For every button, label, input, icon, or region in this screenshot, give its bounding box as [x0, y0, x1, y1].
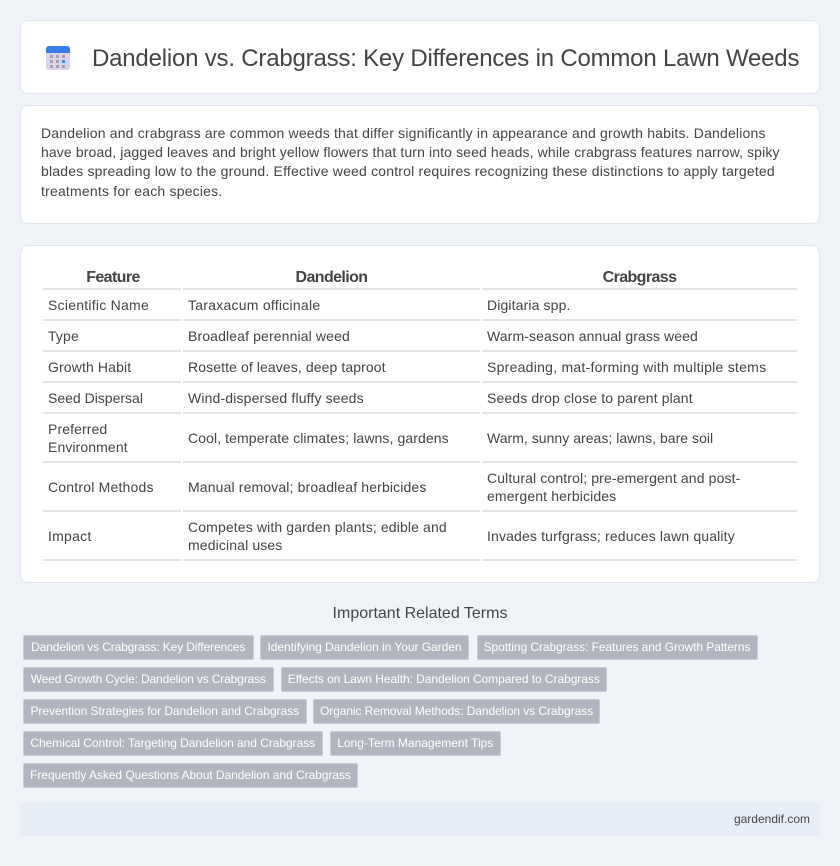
cell: dandelion impact — [188, 519, 447, 553]
cell: crabgrass type: Warm-season annual grass weed — [487, 328, 698, 344]
tag: Effects on Lawn Health: Dandelion Compared to Crabgrass — [288, 672, 600, 686]
row: Growth Habit: Growth Habit — [48, 359, 131, 375]
header: Feature: Feature — [86, 269, 140, 286]
row: Preferred Environment: Environment — [48, 439, 128, 455]
footer source: gardendif.com — [734, 812, 810, 826]
tag — [23, 635, 254, 660]
title: Dandelion vs. Crabgrass: Key Differences in Common Lawn Weeds — [92, 45, 799, 72]
related term tags — [23, 635, 758, 788]
cell: crabgrass scientific name: Digitaria spp. — [487, 297, 571, 313]
tag — [330, 731, 501, 756]
tag: Organic Removal Methods: Dandelion vs Crabgrass — [320, 704, 593, 718]
row: Preferred Environment — [48, 421, 128, 455]
cell: dandelion impact: Competes with garden plants; edible and — [188, 519, 447, 535]
cell: dandelion growth habit: Rosette of leaves, deep taproot — [188, 359, 386, 375]
cell: crabgrass growth habit: Spreading, mat-forming with multiple stems — [487, 359, 766, 375]
panel: introduction — [20, 105, 820, 224]
panel: comparison table — [20, 245, 820, 583]
cell: dandelion environment: Cool, temperate climates; lawns, gardens — [188, 430, 449, 446]
tag: Chemical Control: Targeting Dandelion and Crabgrass — [30, 736, 315, 750]
header: Crabgrass: Crabgrass — [603, 269, 676, 286]
intro text: have broad, jagged leaves and bright yellow flowers that turn into seed heads, while crabgrass features narrow, spiky — [41, 144, 780, 160]
header: Dandelion: Dandelion — [296, 269, 367, 286]
tag — [313, 699, 600, 724]
panel: title header — [20, 20, 820, 94]
row: Type: Type — [48, 328, 79, 344]
cell: dandelion control: Manual removal; broadleaf herbicides — [188, 479, 427, 495]
cell: dandelion impact: medicinal uses — [188, 537, 282, 553]
tag — [23, 731, 322, 756]
row: Scientific Name: Scientific Name — [48, 297, 149, 313]
footer bar — [20, 802, 820, 836]
tag: Long-Term Management Tips — [337, 736, 493, 750]
heading: related terms: Important Related Terms — [333, 605, 507, 622]
tag: Prevention Strategies for Dandelion and Crabgrass — [30, 704, 299, 718]
intro text — [41, 125, 780, 199]
cell: crabgrass control: emergent herbicides — [487, 488, 616, 504]
tag — [23, 763, 358, 788]
cell: crabgrass control — [487, 470, 740, 504]
cell: crabgrass impact: Invades turfgrass; reduces lawn quality — [487, 528, 735, 544]
cell: dandelion type: Broadleaf perennial weed — [188, 328, 350, 344]
row: Control Methods: Control Methods — [48, 479, 154, 495]
tag — [23, 699, 306, 724]
cell: crabgrass control: Cultural control; pre-emergent and post- — [487, 470, 740, 486]
tag — [280, 667, 607, 692]
tag: Spotting Crabgrass: Features and Growth Patterns — [484, 640, 750, 654]
tag — [476, 635, 758, 660]
row: Impact: Impact — [48, 528, 92, 544]
cell: dandelion scientific name: Taraxacum officinale — [188, 297, 320, 313]
icon: calendar — [46, 46, 70, 70]
tag — [23, 667, 274, 692]
cell: dandelion seed dispersal: Wind-dispersed fluffy seeds — [188, 390, 364, 406]
intro text: blades spreading low to the ground. Effective weed control requires recognizing these distinctions to apply targeted — [41, 163, 775, 179]
intro text: treatments for each species. — [41, 183, 222, 199]
row: Preferred Environment: Preferred — [48, 421, 107, 437]
tag — [260, 635, 469, 660]
tag: Dandelion vs Crabgrass: Key Differences — [31, 640, 245, 654]
tag: Weed Growth Cycle: Dandelion vs Crabgrass — [31, 672, 266, 686]
tag: Identifying Dandelion in Your Garden — [267, 640, 462, 654]
tag: Frequently Asked Questions About Dandelion and Crabgrass — [30, 768, 351, 782]
row: Seed Dispersal: Seed Dispersal — [48, 390, 143, 406]
intro text: Dandelion and crabgrass are common weeds that differ significantly in appearance and growth habits. Dandelions — [41, 125, 766, 141]
cell: crabgrass environment: Warm, sunny areas; lawns, bare soil — [487, 430, 713, 446]
cell: crabgrass seed dispersal: Seeds drop close to parent plant — [487, 390, 693, 406]
